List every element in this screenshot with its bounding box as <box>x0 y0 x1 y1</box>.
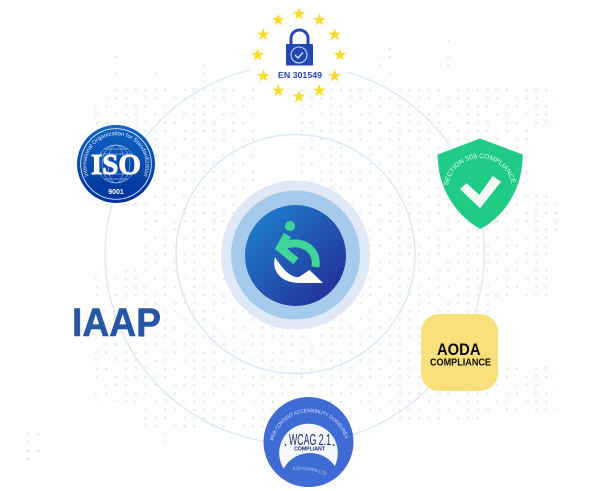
badge: WCAG 2.1 compliant <box>264 397 354 487</box>
inner orbit ring <box>176 134 415 374</box>
icon: check mark <box>460 176 501 208</box>
label: guidelines arc: WEB CONTENT ACCESSIBILITY GUIDELINES <box>270 408 348 440</box>
logo: IAAP: IAAP <box>72 301 161 345</box>
icon: wheelchair user <box>274 221 323 283</box>
badge: Section 508 compliance shield <box>438 138 523 229</box>
dotted world map background <box>20 40 558 460</box>
label: EN 301549: EN 301549 <box>278 70 322 80</box>
icon: globe <box>97 145 135 183</box>
badge: ISO 9001 <box>77 125 155 203</box>
label: COMPLIANT: COMPLIANT <box>294 446 326 452</box>
icon: padlock <box>286 30 313 66</box>
outer orbit ring <box>105 70 484 444</box>
central logo <box>221 180 370 330</box>
label: EqualWeb Ltd: EQUALWEB LTD <box>293 466 327 475</box>
label: COMPLIANCE: COMPLIANCE <box>430 358 491 369</box>
badge: EN 301549 <box>251 7 346 102</box>
label: WCAG 2.1: WCAG 2.1 <box>289 432 331 449</box>
label: AODA: AODA <box>437 341 481 359</box>
label: 9001: 9001 <box>108 189 124 196</box>
label: Section 508 compliance: SECTION 508 COMPLIANCE <box>444 154 516 186</box>
icon: ring of EU stars <box>251 7 346 102</box>
label: ISO: ISO <box>91 150 141 181</box>
badge: AODA compliance <box>421 314 498 391</box>
label: organization name: International Organization for Standardization <box>83 131 150 177</box>
